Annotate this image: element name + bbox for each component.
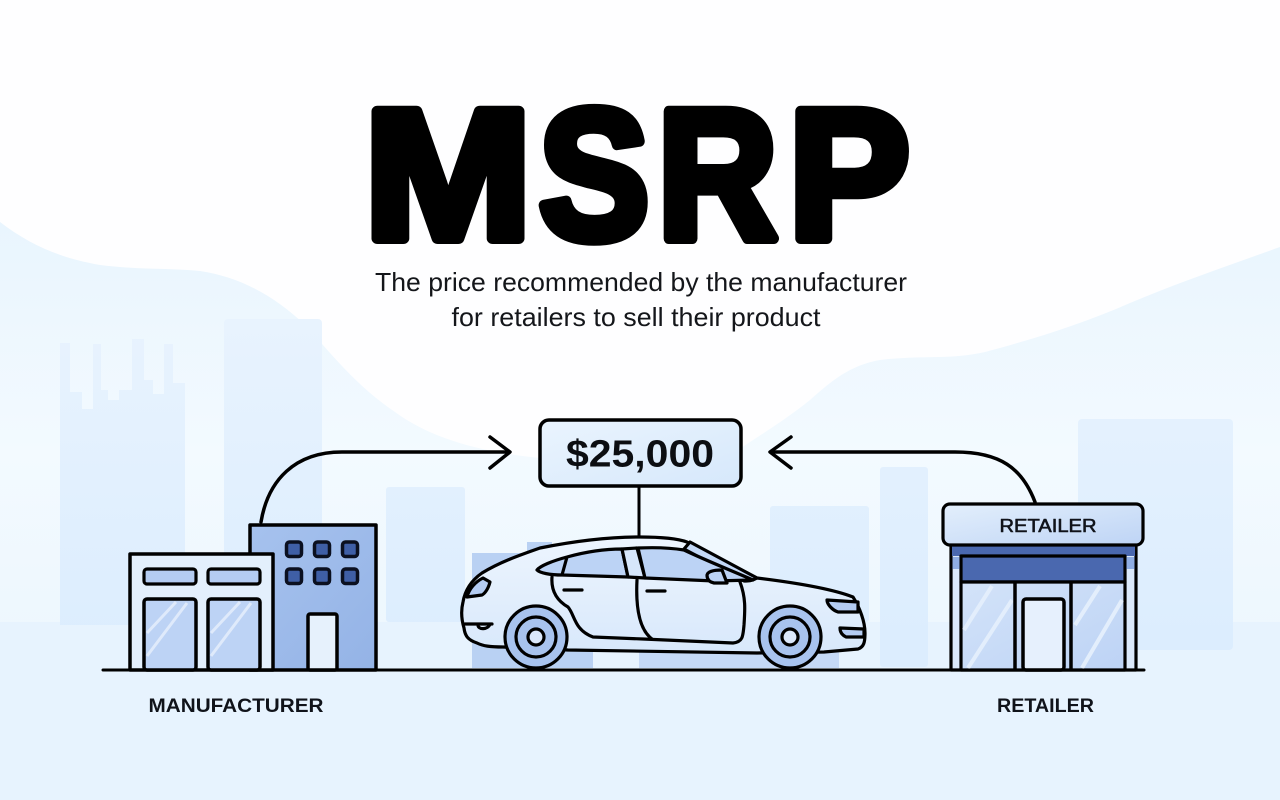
low building signs [144,569,260,584]
price connector [638,486,640,538]
door handles [564,590,665,591]
icon: manufacturer building [130,525,376,670]
icon: car [462,537,865,668]
door lines [552,577,745,643]
side windows [537,549,628,577]
shop door [1023,599,1064,670]
front vent [840,628,864,637]
subtitle [375,267,907,332]
rear light [467,578,490,597]
car body [462,537,865,653]
title: R [658,72,778,278]
background skyline [60,319,1233,668]
label: manufacturer: MANUFACTURER [148,696,324,717]
price tag [540,420,741,486]
rear wheel [505,606,567,668]
label: retailer: RETAILER [997,696,1094,717]
glass reflections [147,602,251,656]
tower windows [286,542,358,584]
subtitle: The price recommended by the manufacturer [375,267,907,297]
title: P [788,72,910,278]
head light [827,600,858,612]
low building [130,554,273,670]
sign board [943,504,1143,545]
awning strip [952,546,1135,556]
rear reflector [465,624,492,629]
tower door [308,614,337,670]
mirror [707,570,727,583]
sign board: RETAILER [1000,516,1096,536]
ground line [103,668,1144,672]
shop windows [961,582,1125,670]
title: M [364,72,532,278]
icon: retailer storefront [943,504,1143,670]
front wheel [759,606,821,668]
window mullions [1015,582,1071,670]
arrow: retailer to price [770,437,1035,502]
arrow: manufacturer to price [261,437,510,522]
subtitle: for retailers to sell their product [452,302,821,332]
office tower [250,525,376,670]
price tag: $25,000 [566,434,714,476]
title [364,72,910,278]
title: S [539,72,649,278]
roof stripe [684,542,757,581]
low building doors [144,599,260,670]
shop frame [951,540,1136,670]
window reflections [964,586,1122,668]
